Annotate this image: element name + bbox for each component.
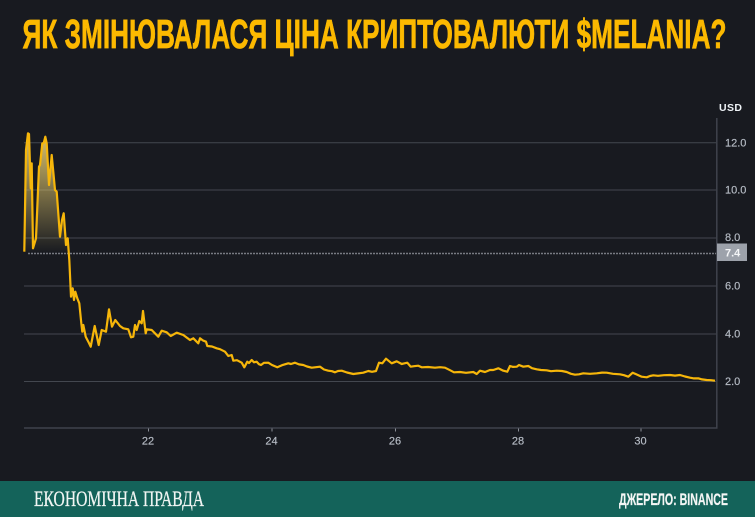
publisher logo: ЕКОНОМІЧНА ПРАВДА <box>34 486 204 511</box>
current price tag <box>717 244 747 261</box>
x axis ticks and labels <box>142 428 647 448</box>
y axis labels: 10.0 <box>725 184 746 196</box>
x axis ticks and labels: 26 <box>389 436 401 448</box>
y axis labels: 12.0 <box>725 138 746 150</box>
axes <box>24 118 717 428</box>
x axis ticks and labels: 30 <box>634 436 647 448</box>
y axis labels: 6.0 <box>725 280 740 292</box>
y axis labels: 8.0 <box>725 232 740 244</box>
y axis labels <box>725 138 746 388</box>
price line <box>24 133 715 381</box>
horizontal grid lines <box>24 143 717 382</box>
y axis labels: 4.0 <box>725 328 740 340</box>
y axis unit: USD <box>719 102 742 114</box>
current price tag: 7.4 <box>725 248 741 260</box>
x axis ticks and labels: 22 <box>142 436 154 448</box>
price chart <box>24 102 747 448</box>
reference price line 7.4 <box>28 252 717 254</box>
footer band <box>0 481 755 517</box>
area under the price above the opening level <box>24 133 68 254</box>
x axis ticks and labels: 24 <box>265 436 278 448</box>
y axis labels: 2.0 <box>725 376 740 388</box>
x axis ticks and labels: 28 <box>512 436 524 448</box>
